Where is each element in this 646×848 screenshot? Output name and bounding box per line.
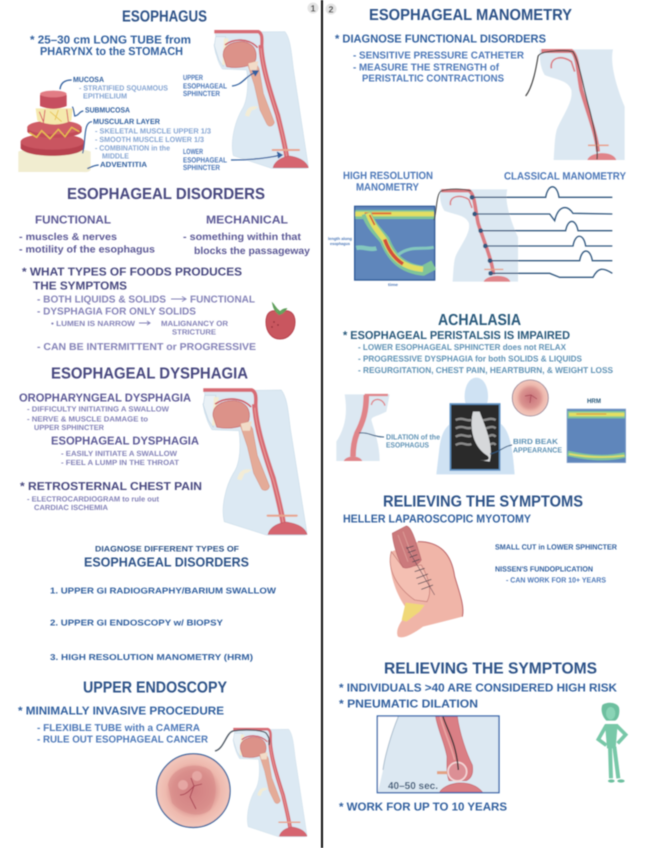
chart: achalasia heat map (567, 409, 626, 463)
label: bird beak (513, 437, 562, 455)
text block: endoscopy notes: - RULE OUT ESOPHAGEAL CANCER (37, 735, 209, 746)
column: functional: FUNCTIONAL (35, 214, 111, 226)
text block: food types: - DYSPHAGIA FOR ONLY SOLIDS (37, 306, 196, 317)
text block: endoscopy notes: * MINIMALLY INVASIVE PROCEDURE (18, 705, 224, 717)
icon: apple (266, 304, 295, 339)
list: diagnostic tests: 3. HIGH RESOLUTION MANOMETRY (HRM) (50, 652, 253, 662)
text block: manometry notes: * DIAGNOSE FUNCTIONAL DISORDERS (335, 33, 546, 45)
text block: risk and dilation: * PNEUMATIC DILATION (339, 698, 478, 710)
panel: achalasia (336, 312, 626, 474)
labels: wall layers: SUBMUCOSA (85, 106, 131, 114)
panel: relieving the symptoms, dilation (339, 660, 626, 814)
heading: relieving the symptoms: RELIEVING THE SYMPTOMS (384, 660, 597, 677)
leader: bird beak (490, 445, 512, 454)
heading: diagnose different types: ESOPHAGEAL DISORDERS (84, 555, 249, 570)
labels: wall layers: MIDDLE (102, 152, 129, 160)
heading: relieving the symptoms: RELIEVING THE SYMPTOMS (383, 494, 583, 511)
icon: patient (598, 703, 626, 783)
text block: food types (22, 267, 256, 353)
headings: manometry types: MANOMETRY (356, 182, 419, 194)
text block: food types: - BOTH LIQUIDS & SOLIDS (37, 295, 166, 306)
illustration: head and torso anatomy (233, 729, 307, 837)
labels: wall layers: EPITHELIUM (83, 92, 127, 100)
panel: esophageal disorders (19, 186, 310, 353)
heading: upper endoscopy: UPPER ENDOSCOPY (83, 679, 227, 696)
arrow: submucosa (72, 107, 83, 116)
text block: duration of effect: * WORK FOR UP TO 10 YEARS (339, 802, 507, 814)
heading: esophagus: ESOPHAGUS (122, 9, 207, 26)
labels: sphincters: ESOPHAGEAL (183, 82, 227, 90)
text block: retrosternal chest pain: - ELECTROCARDIOGRAM to rule out (27, 494, 159, 503)
text block: esophageal dysphagia: ESOPHAGEAL DYSPHAGIA (51, 436, 199, 448)
text block: esophagus length: PHARYNX to the STOMACH (40, 46, 183, 58)
page number 2: 2 (328, 4, 334, 14)
text block: oropharyngeal dysphagia: - NERVE & MUSCLE DAMAGE to (27, 415, 148, 424)
subheading: heller myotomy: HELLER LAPAROSCOPIC MYOTOMY (343, 513, 531, 525)
arrow: mucosa (60, 80, 72, 89)
axis labels: heat map (328, 236, 399, 287)
axis labels: heat map: esophagus (330, 241, 351, 246)
text block: achalasia notes: - LOWER ESOPHAGEAL SPHINCTER does not RELAX (358, 342, 566, 352)
illustration: head and torso anatomy (203, 390, 307, 535)
heading: esophageal disorders: ESOPHAGEAL DISORDERS (67, 186, 265, 203)
text block: food types: FUNCTIONAL (190, 295, 255, 306)
illustration: esophageal wall layers (18, 91, 91, 172)
labels: sphincters: LOWER (183, 147, 203, 156)
arrow: upper sphincter (232, 71, 258, 86)
panel: relieving the symptoms, surgery (343, 494, 618, 637)
labels: sphincters: SPHINCTER (183, 163, 220, 172)
label: dilation (386, 433, 440, 450)
chart: classical manometry traces (470, 187, 612, 277)
heading: achalasia: ACHALASIA (438, 312, 521, 329)
illustration: fundoplication stomach (390, 526, 463, 637)
list: diagnostic tests: 1. UPPER GI RADIOGRAPHY/BARIUM SWALLOW (50, 585, 277, 595)
list: diagnostic tests (50, 585, 277, 662)
heading: esophageal manometry: ESOPHAGEAL MANOMETRY (369, 7, 572, 24)
illustration: pneumatic dilation inset (377, 716, 499, 793)
text block: esophageal dysphagia: - EASILY INITIATE A SWALLOW (61, 449, 178, 458)
list: diagnostic tests: 2. UPPER GI ENDOSCOPY w/ BIOPSY (50, 618, 223, 628)
axis labels: heat map: time (388, 282, 399, 287)
text block: risk and dilation: * INDIVIDUALS >40 ARE CONSIDERED HIGH RISK (339, 683, 618, 695)
text block: retrosternal chest pain (20, 481, 202, 512)
text block: esophageal dysphagia: - FEEL A LUMP IN THE THROAT (61, 458, 179, 467)
text block: oropharyngeal dysphagia: - DIFFICULTY INITIATING A SWALLOW (27, 405, 170, 414)
column: mechanical: MECHANICAL (206, 214, 288, 226)
arrow: adventitia (87, 165, 99, 169)
text block: achalasia notes: * ESOPHAGEAL PERISTALSIS IS IMPAIRED (343, 330, 570, 342)
text block: endoscopy notes (18, 705, 224, 746)
panel: esophageal manometry (328, 7, 626, 287)
column: mechanical: blocks the passageway (194, 246, 310, 257)
text block: food types: MALIGNANCY OR (161, 319, 229, 328)
headings: manometry types: CLASSICAL MANOMETRY (504, 170, 626, 182)
text block: manometry notes: PERISTALTIC CONTRACTIONS (362, 74, 504, 85)
labels: sphincters (183, 73, 227, 172)
panel: upper endoscopy (18, 679, 307, 837)
axis labels: heat map: length along (328, 236, 353, 241)
label: dilation: DILATION of the (386, 433, 440, 442)
illustration: achalasia endoscopic view (512, 380, 548, 416)
text block: procedure notes (495, 542, 618, 585)
labels: wall layers: ADVENTITIA (100, 160, 148, 169)
text block: procedure notes: - CAN WORK FOR 10+ YEARS (506, 576, 606, 585)
page number 1 (308, 2, 318, 14)
text block: risk and dilation (339, 683, 618, 710)
panel: esophagus (18, 9, 308, 172)
text block: food types: THE SYMPTOMS (33, 280, 127, 292)
labels: wall layers: - SKELETAL MUSCLE UPPER 1/3 (95, 126, 211, 136)
text block: manometry notes: - MEASURE THE STRENGTH of (353, 63, 500, 74)
chart: high resolution manometry heat map (355, 206, 435, 280)
text block: achalasia notes: - PROGRESSIVE DYSPHAGIA for both SOLIDS & LIQUIDS (358, 354, 582, 364)
page number 1: 1 (310, 4, 316, 14)
text block: retrosternal chest pain: * RETROSTERNAL CHEST PAIN (20, 481, 202, 493)
leader: dilation (359, 433, 384, 437)
labels: wall layers: - SMOOTH MUSCLE LOWER 1/3 (95, 135, 204, 144)
text block: esophagus length: * 25–30 cm LONG TUBE from (30, 34, 191, 46)
text block: achalasia notes (343, 330, 613, 375)
labels: sphincters: SPHINCTER (183, 89, 220, 98)
text block: esophageal dysphagia (51, 436, 199, 467)
text block: food types: • LUMEN IS NARROW (51, 319, 136, 328)
text block: manometry notes: - SENSITIVE PRESSURE CATHETER (353, 50, 525, 61)
column: mechanical (183, 214, 310, 257)
text block: manometry notes (335, 33, 546, 85)
chart label: HRM: HRM (587, 398, 601, 405)
text block: retrosternal chest pain: CARDIAC ISCHEMIA (34, 503, 109, 512)
label: duration: 40–50 sec. (388, 781, 438, 792)
labels: sphincters: UPPER (183, 73, 203, 82)
label: bird beak: BIRD BEAK (513, 437, 559, 446)
headings: manometry types: HIGH RESOLUTION (343, 170, 433, 182)
illustration: catheter with sensors (440, 189, 518, 282)
text block: oropharyngeal dysphagia: UPPER SPHINCTER (34, 423, 105, 432)
text block: oropharyngeal dysphagia: OROPHARYNGEAL DYSPHAGIA (19, 393, 191, 405)
labels: wall layers: MUSCULAR LAYER (93, 117, 161, 126)
heading: esophageal dysphagia: ESOPHAGEAL DYSPHAGIA (51, 365, 248, 382)
text block: food types: - CAN BE INTERMITTENT or PROGRESSIVE (37, 342, 256, 353)
illustration: chest x-ray (436, 378, 515, 474)
labels: sphincters: ESOPHAGEAL (183, 156, 227, 165)
column: functional (19, 214, 155, 256)
illustration: head and torso anatomy (214, 32, 308, 168)
illustration: dilated esophagus (336, 394, 390, 461)
column: mechanical: - something within that (183, 232, 302, 243)
label: bird beak: APPEARANCE (513, 446, 562, 455)
label: dilation: ESOPHAGUS (386, 441, 429, 450)
page number 2 (326, 4, 336, 14)
heading: diagnose different types (84, 545, 249, 570)
arrow: lumen to malignancy (139, 321, 150, 325)
labels: wall layers: - STRATIFIED SQUAMOUS (79, 84, 168, 92)
column: functional: - muscles & nerves (19, 232, 117, 243)
text block: achalasia notes: - REGURGITATION, CHEST PAIN, HEARTBURN, & WEIGHT LOSS (358, 365, 613, 375)
illustration: manometry catheter (526, 49, 625, 160)
arrow: muscular layer (83, 122, 92, 153)
endoscope tube (215, 730, 269, 751)
panel: esophageal dysphagia (19, 365, 307, 535)
text block: food types: * WHAT TYPES OF FOODS PRODUCES (22, 267, 242, 279)
text block: esophagus length (30, 34, 191, 58)
labels: wall layers: MUCOSA (73, 75, 105, 84)
illustration: endoscopic view (156, 754, 230, 828)
text block: procedure notes: SMALL CUT in LOWER SPHINCTER (495, 542, 618, 551)
text block: endoscopy notes: - FLEXIBLE TUBE with a CAMERA (37, 723, 200, 734)
labels: wall layers: - COMBINATION in the (95, 144, 170, 152)
arrow: liquids and solids to functional (171, 296, 186, 302)
panel: diagnosis (50, 545, 277, 662)
heading: diagnose different types: DIAGNOSE DIFFERENT TYPES OF (95, 545, 239, 554)
headings: manometry types (343, 170, 626, 194)
text block: food types: STRICTURE (172, 328, 216, 337)
page divider (321, 0, 323, 848)
catheter lead (434, 189, 471, 220)
labels: wall layers (73, 75, 211, 169)
text block: procedure notes: NISSEN'S FUNDOPLICATION (495, 565, 593, 574)
arrow: lower sphincter (231, 152, 282, 160)
column: functional: - motility of the esophagus (19, 245, 155, 256)
text block: oropharyngeal dysphagia (19, 393, 191, 432)
